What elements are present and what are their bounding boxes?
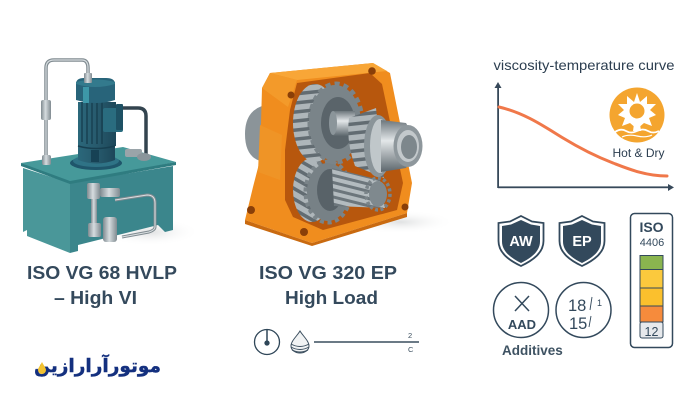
housing bbox=[245, 63, 412, 246]
logo: Persian brand name: موتورآرارازین bbox=[34, 354, 161, 377]
motor bbox=[70, 78, 123, 170]
icon: gauge bbox=[254, 330, 280, 354]
hot and dry label: Hot & Dry bbox=[612, 146, 665, 160]
badge: 18/15 cleanliness code: 1 bbox=[597, 298, 602, 308]
curve bbox=[499, 107, 667, 176]
gear: lower bbox=[293, 158, 390, 222]
rear shaft bbox=[245, 106, 262, 161]
scale bar bbox=[640, 256, 663, 338]
heading: gear oil grade: High Load bbox=[285, 288, 378, 308]
pipes bbox=[46, 60, 155, 237]
line with small labels: 2 bbox=[408, 331, 412, 340]
badge: AAD additive: AAD bbox=[508, 317, 536, 332]
heading: gear oil grade bbox=[259, 263, 397, 308]
badge: 18/15 cleanliness code: 18 bbox=[568, 297, 586, 315]
panel: ISO 4406 cleanliness scale: ISO bbox=[639, 219, 664, 235]
icon: hot and dry sun bbox=[610, 88, 664, 142]
heading: gear oil grade: ISO VG 320 EP bbox=[259, 263, 397, 283]
heading: hydraulic oil grade bbox=[27, 263, 177, 308]
gear: right with output shaft bbox=[348, 108, 422, 178]
axes bbox=[494, 82, 674, 191]
badge: AW shield: AW bbox=[509, 234, 533, 250]
panel: ISO 4406 cleanliness scale: 4406 bbox=[640, 237, 664, 249]
line with small labels: C bbox=[408, 345, 414, 354]
heading: hydraulic oil grade: – High VI bbox=[54, 288, 137, 308]
chart title: viscosity-temperature curve bbox=[494, 57, 675, 73]
icon: oil drop bbox=[291, 331, 309, 353]
badge: 18/15 cleanliness code bbox=[556, 282, 611, 338]
panel: ISO 4406 cleanliness scale bbox=[630, 214, 672, 348]
heading: hydraulic oil grade: ISO VG 68 HVLP bbox=[27, 263, 177, 283]
badge: EP shield bbox=[560, 216, 604, 266]
pipe fittings bbox=[41, 73, 151, 242]
additives label: Additives bbox=[502, 343, 563, 358]
gear: upper left bbox=[293, 84, 362, 162]
illustration: gearbox bbox=[245, 63, 455, 246]
badge: AW shield bbox=[498, 216, 544, 266]
illustration: hydraulic power unit bbox=[21, 60, 200, 253]
badge: AAD additive bbox=[494, 282, 548, 338]
chart: viscosity-temperature curve bbox=[494, 57, 675, 191]
badge: EP shield: EP bbox=[572, 234, 592, 250]
small icons row bbox=[254, 330, 419, 354]
line with small labels bbox=[314, 331, 419, 354]
badge: 18/15 cleanliness code: 15 bbox=[569, 315, 587, 333]
panel: ISO 4406 cleanliness scale: 12 bbox=[645, 325, 658, 339]
tank body bbox=[21, 147, 176, 253]
